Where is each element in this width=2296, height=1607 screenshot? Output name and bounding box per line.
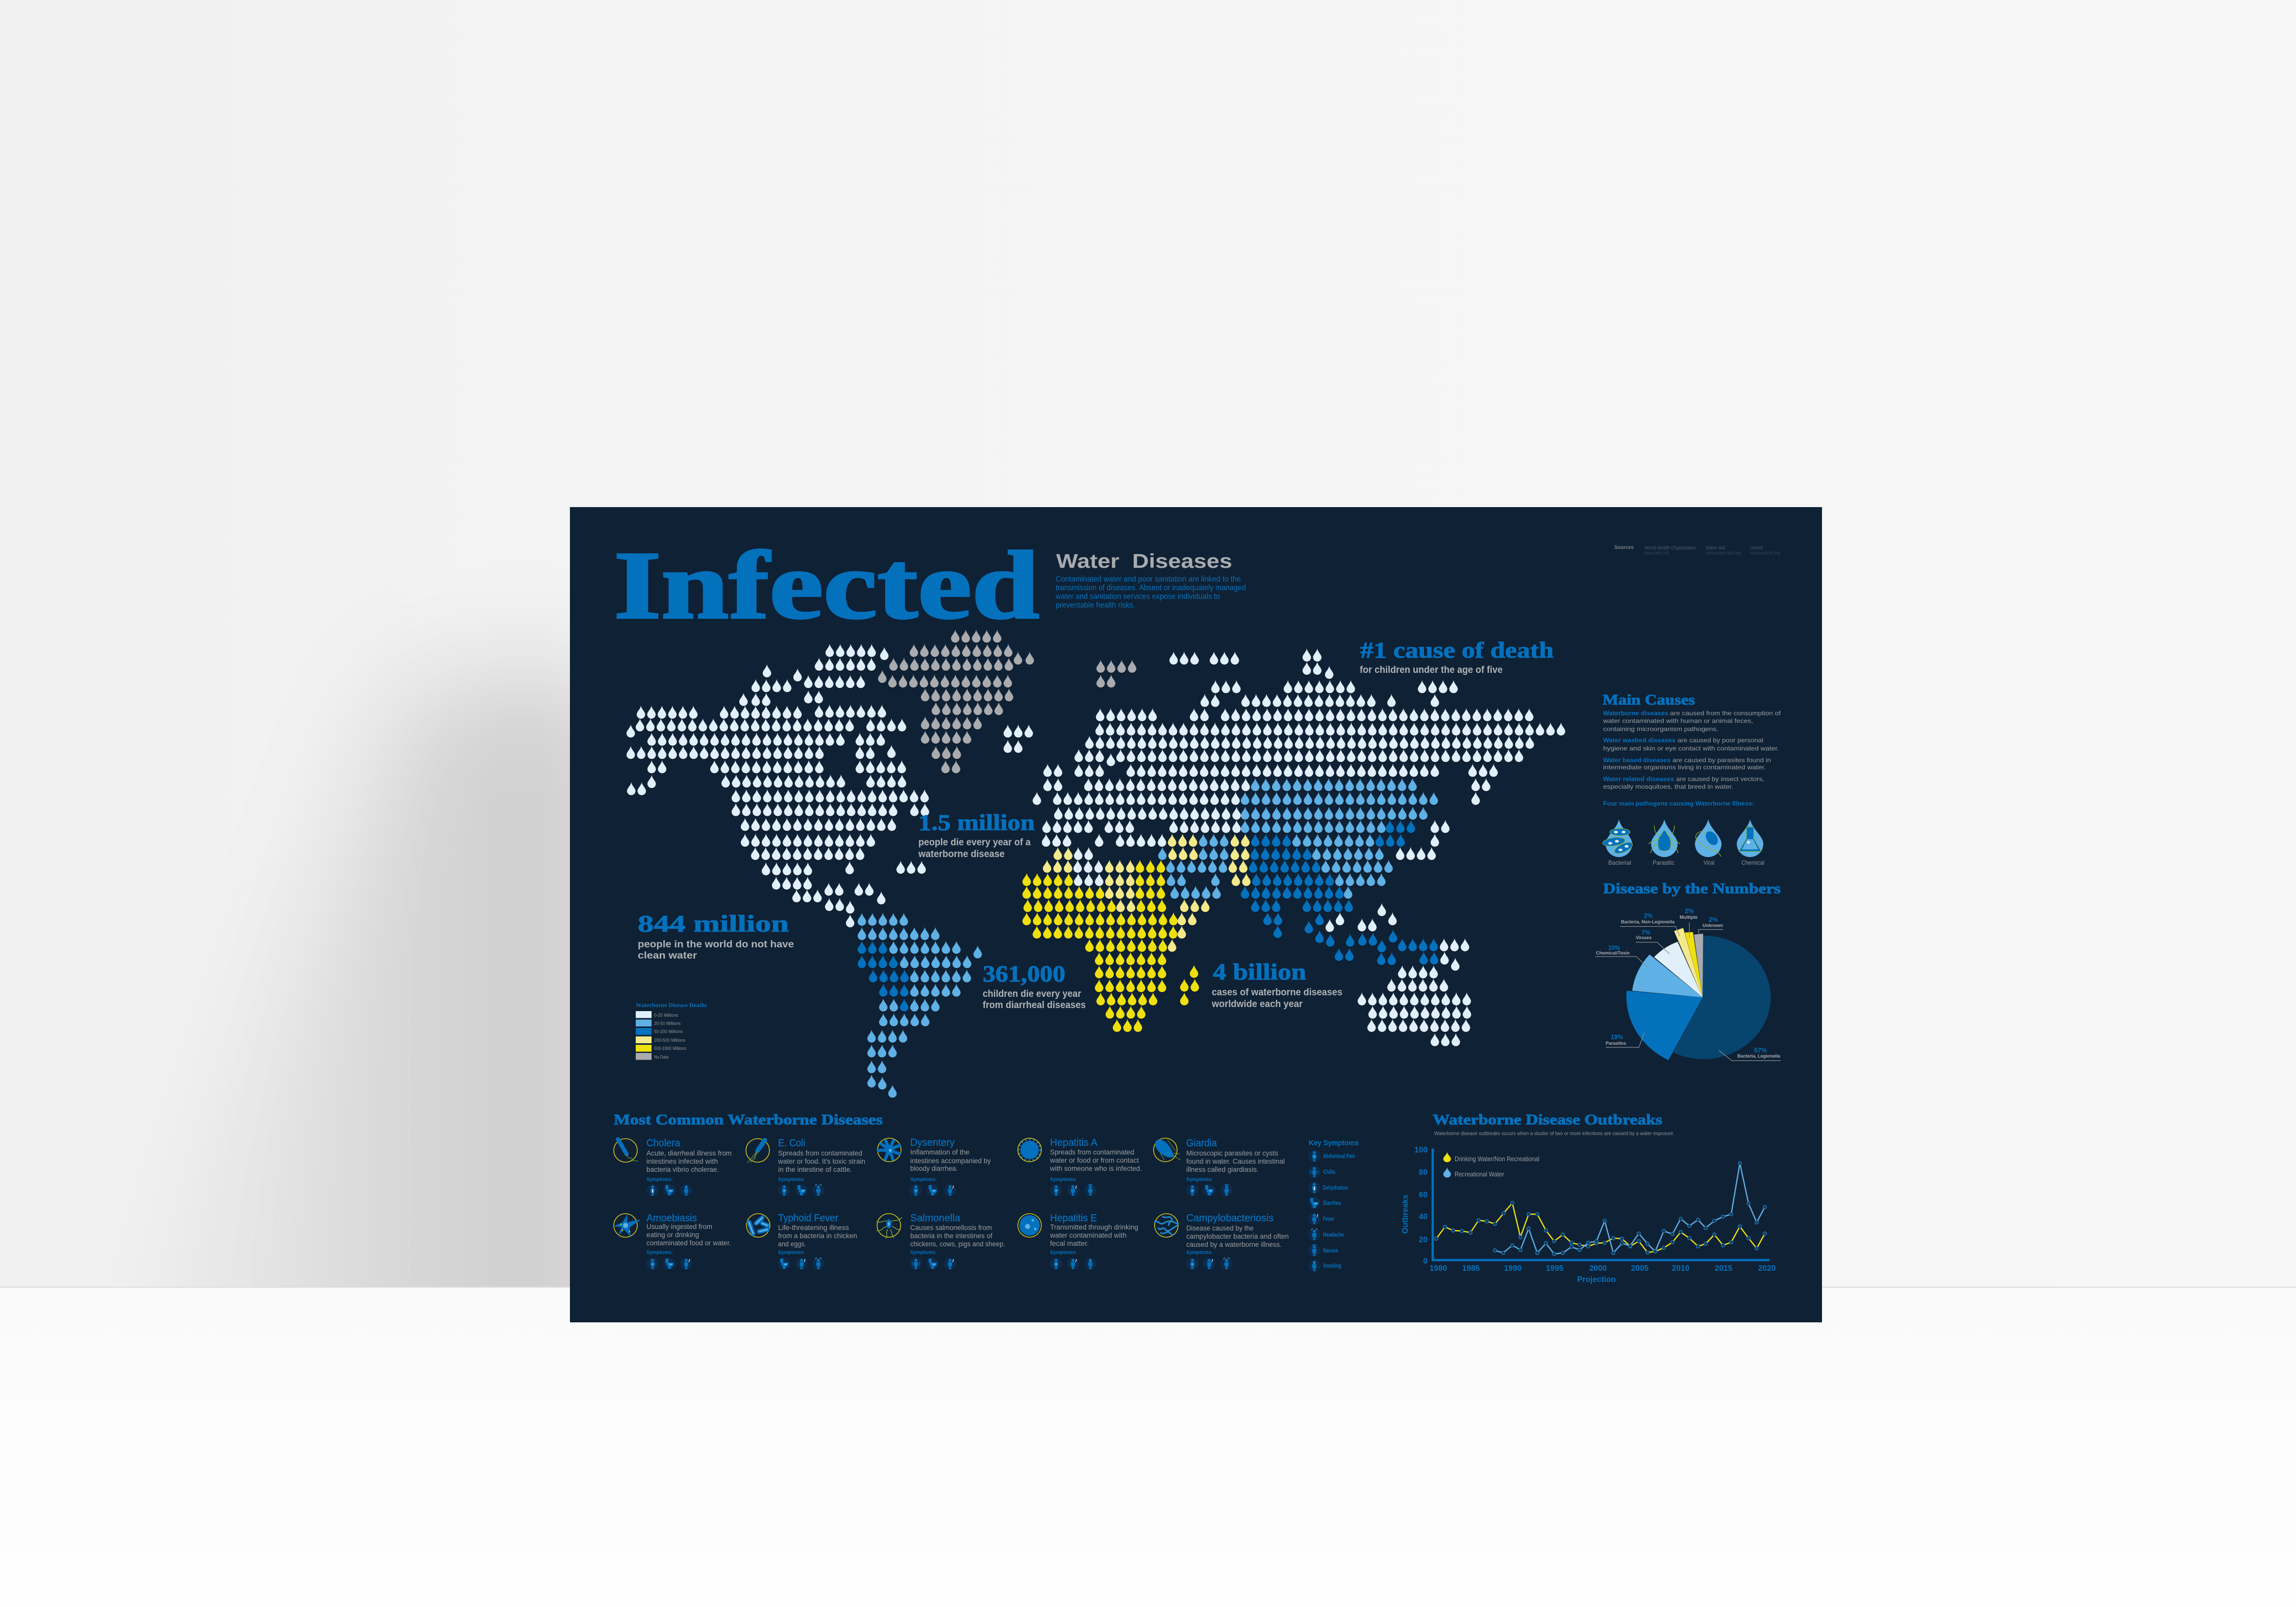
panel: key symptoms: Key Symptoms <box>1309 1139 1359 1147</box>
card: campylobacteriosis: Symptoms: <box>1186 1249 1213 1256</box>
panel: waterborne disease outbreaks: Waterborne Disease Outbreaks <box>1433 1112 1662 1128</box>
intro text: preventable health risks. <box>1056 601 1135 610</box>
line chart: 1995 <box>1546 1264 1564 1273</box>
card: hepatitis a: with someone who is infected. <box>1050 1165 1142 1172</box>
map region: greenland and arctic (no data) <box>878 630 1137 774</box>
card: amoebiasis: Usually ingested from <box>646 1223 712 1231</box>
map legend: 20-50 Millions <box>654 1021 681 1026</box>
panel: key symptoms: Diarrhea <box>1323 1200 1341 1207</box>
stat: 4 billion: 4 billion <box>1213 959 1306 985</box>
map legend: No Data <box>654 1054 669 1060</box>
card: typhoid fever: from a bacteria in chicken <box>778 1232 857 1240</box>
stat: 844 million <box>638 911 794 961</box>
stat: 361,000 <box>983 961 1086 1011</box>
card: amoebiasis <box>613 1213 731 1269</box>
card: hepatitis e: Hepatitis E <box>1050 1213 1097 1224</box>
stat: 361,000: children die every year <box>983 989 1082 999</box>
panel: main causes: water contaminated with human or animal feces, <box>1603 717 1753 724</box>
card: giardia: illness called giardiasis. <box>1186 1166 1259 1173</box>
icon: hepatitis e virus <box>1018 1214 1041 1237</box>
line chart: 2010 <box>1672 1264 1689 1273</box>
card: salmonella <box>877 1213 1005 1269</box>
card: cholera: bacteria vibrio cholerae. <box>646 1166 719 1173</box>
stat: 1.5 million: 1.5 million <box>918 810 1035 835</box>
sources: World Health Organization <box>1644 545 1696 551</box>
intro text <box>1055 575 1246 610</box>
sources: www.unicef.org <box>1750 550 1780 556</box>
line chart: 80 <box>1419 1168 1428 1177</box>
pie labels: Parasites <box>1606 1041 1626 1046</box>
line chart: 0 <box>1423 1257 1428 1266</box>
stat: 4 billion: worldwide each year <box>1211 999 1303 1010</box>
panel: main causes: Bacterial <box>1608 859 1631 866</box>
card: cholera: intestines infected with <box>646 1158 718 1165</box>
map region: africa <box>1022 847 1200 1033</box>
pie chart <box>1627 928 1771 1060</box>
card: amoebiasis: eating or drinking <box>646 1231 699 1239</box>
card: campylobacteriosis: Disease caused by the <box>1186 1224 1254 1232</box>
pie labels: 57% <box>1754 1046 1767 1054</box>
icon: cholera bacterium <box>614 1139 638 1162</box>
icon: giardia parasite <box>1154 1138 1181 1162</box>
line chart: 1990 <box>1504 1264 1521 1273</box>
icon: e. coli bacterium <box>746 1139 769 1163</box>
line chart: 1980 <box>1430 1264 1447 1273</box>
map legend <box>636 1001 707 1060</box>
stat: 844 million: clean water <box>638 950 697 961</box>
line chart: Projection <box>1577 1275 1616 1284</box>
panel: main causes: Main Causes <box>1603 692 1695 708</box>
pie labels: 2% <box>1685 907 1694 915</box>
stat: 1.5 million: waterborne disease <box>918 849 1005 860</box>
card: typhoid fever: Life-threatening illness <box>778 1224 849 1232</box>
pie labels: 7% <box>1641 928 1651 936</box>
panel: main causes: are caused by poor personal <box>1678 737 1763 744</box>
card: hepatitis a <box>1018 1137 1142 1196</box>
pie labels: 2% <box>1709 916 1718 923</box>
intro text: transmission of diseases. Absent or inadequately managed <box>1056 584 1246 592</box>
card: giardia: Symptoms: <box>1186 1176 1213 1183</box>
map region: north america <box>626 644 930 928</box>
poster <box>570 507 1822 1322</box>
map region: eurasia <box>1032 648 1566 939</box>
card: amoebiasis: Amoebiasis <box>646 1213 697 1224</box>
panel: main causes: Water washed diseases <box>1603 737 1676 744</box>
stat: #1 cause of death: #1 cause of death <box>1360 638 1554 663</box>
card: e. coli <box>746 1138 865 1196</box>
card: e. coli: E. Coli <box>778 1138 805 1149</box>
panel: disease by the numbers: Disease by the Numbers <box>1603 881 1781 897</box>
panel: main causes: Parasitic <box>1653 859 1675 866</box>
card: dysentery: intestines accompanied by <box>910 1157 991 1165</box>
panel: main causes: Water based diseases <box>1603 757 1670 764</box>
chart legend: Drinking Water/Non Recreational <box>1455 1155 1539 1163</box>
line chart: 2000 <box>1589 1264 1607 1273</box>
card: typhoid fever: Typhoid Fever <box>778 1213 838 1224</box>
card: dysentery: Dysentery <box>910 1137 955 1148</box>
pie labels: Bacteria, Legionella <box>1737 1053 1781 1059</box>
card: campylobacteriosis: caused by a waterborne illness. <box>1186 1241 1282 1248</box>
panel: main causes: are caused by parasites found in <box>1673 757 1771 764</box>
panel: main causes: Chemical <box>1741 859 1764 866</box>
icon: viral <box>1695 819 1721 857</box>
sources: www.who.int <box>1644 550 1669 556</box>
pie labels: 19% <box>1611 1033 1623 1041</box>
panel: main causes: Waterborne diseases <box>1603 710 1668 717</box>
pie labels: Multiple <box>1680 915 1698 920</box>
panel: main causes: containing microorganism pathogens. <box>1603 725 1718 733</box>
panel: key symptoms: Dehydration <box>1323 1185 1348 1191</box>
panel: main causes: Water related diseases <box>1603 775 1674 783</box>
intro text: Contaminated water and poor sanitation are linked to the <box>1056 575 1241 584</box>
map legend: 200-500 Millions <box>654 1038 685 1043</box>
line chart: 2005 <box>1631 1264 1649 1273</box>
heading: most common waterborne diseases: Most Common Waterborne Diseases <box>614 1112 883 1128</box>
line chart: Outbreaks <box>1401 1195 1410 1234</box>
card: salmonella: Symptoms: <box>910 1249 937 1256</box>
card: e. coli: in the intestine of cattle. <box>778 1166 852 1173</box>
line chart: 1985 <box>1462 1264 1480 1273</box>
card: hepatitis e: fecal matter. <box>1050 1240 1089 1247</box>
card: hepatitis a: Hepatitis A <box>1050 1137 1098 1148</box>
stat: 361,000: from diarrheal diseases <box>983 1000 1086 1011</box>
icon: bacterial <box>1602 819 1634 857</box>
sources: www.wateraid.org <box>1705 550 1741 556</box>
stat: #1 cause of death <box>1360 638 1554 675</box>
sources <box>1614 545 1780 556</box>
panel: main causes: especially mosquitoes, that breed in water. <box>1603 783 1733 790</box>
card: hepatitis e <box>1018 1213 1138 1269</box>
sources: Water Aid <box>1706 545 1725 551</box>
pie labels: Unknown <box>1703 923 1723 928</box>
card: giardia: Giardia <box>1186 1138 1217 1149</box>
sources: Sources <box>1614 545 1634 550</box>
panel: main causes: intermediate organisms living in contaminated water. <box>1603 764 1766 771</box>
card: hepatitis a: Spreads from contaminated <box>1050 1148 1134 1156</box>
card: hepatitis e: water contaminated with <box>1050 1232 1127 1239</box>
pie labels: 2% <box>1644 912 1653 919</box>
map region: south america <box>857 913 983 1099</box>
card: salmonella: Salmonella <box>910 1213 961 1224</box>
stat: 361,000: 361,000 <box>983 961 1065 987</box>
card: e. coli: Spreads from contaminated <box>778 1149 862 1157</box>
card: hepatitis a: Symptoms: <box>1050 1176 1077 1183</box>
pie labels: Viruses <box>1636 935 1652 941</box>
card: cholera: Symptoms: <box>646 1176 673 1183</box>
panel: disease by the numbers <box>1595 881 1781 1061</box>
card: amoebiasis: Symptoms: <box>646 1249 673 1256</box>
panel: key symptoms: Vomiting <box>1323 1263 1341 1269</box>
card: cholera <box>614 1138 732 1196</box>
card: hepatitis a: water or food or from contact <box>1050 1157 1139 1164</box>
panel: main causes: Viral <box>1704 859 1714 866</box>
icon: chemical <box>1737 819 1763 857</box>
stat: 844 million: 844 million <box>638 911 789 937</box>
panel: key symptoms: Headache <box>1323 1232 1344 1238</box>
line chart: 100 <box>1414 1146 1428 1154</box>
card: dysentery: bloody diarrhea. <box>910 1165 958 1172</box>
panel: main causes: are caused from the consumption of <box>1670 710 1781 717</box>
stat: 1.5 million: people die every year of a <box>918 837 1031 848</box>
card: salmonella: bacteria in the intestines of <box>910 1232 992 1240</box>
card: amoebiasis: contaminated food or water. <box>646 1239 731 1247</box>
title: Infected <box>614 532 1039 639</box>
world map of water drops <box>626 630 1566 1099</box>
card: campylobacteriosis <box>1154 1213 1289 1269</box>
card: giardia <box>1154 1138 1285 1196</box>
panel: waterborne disease outbreaks <box>1401 1112 1776 1284</box>
icon: hepatitis a virus <box>1018 1138 1041 1162</box>
background: cast shadow <box>203 639 570 1287</box>
line chart: 20 <box>1419 1236 1428 1244</box>
background: floor <box>0 1287 2296 1607</box>
card: dysentery <box>878 1137 991 1196</box>
pie labels: 10% <box>1608 944 1620 951</box>
pie labels <box>1595 907 1781 1061</box>
icon: dysentery organism <box>878 1138 901 1162</box>
card: dysentery: Symptoms: <box>910 1176 937 1183</box>
panel: main causes <box>1602 692 1781 866</box>
card: typhoid fever: Symptoms: <box>778 1249 805 1256</box>
panel: key symptoms <box>1308 1139 1359 1271</box>
card: salmonella: chickens, cows, pigs and sheep. <box>910 1240 1005 1248</box>
card: hepatitis e: Transmitted through drinking <box>1050 1223 1138 1231</box>
panel: key symptoms: Fever <box>1323 1216 1334 1222</box>
stat: 844 million: people in the world do not have <box>638 939 794 950</box>
panel: main causes: hygiene and skin or eye contact with contaminated water. <box>1603 745 1779 752</box>
icon: salmonella bacterium <box>877 1214 902 1239</box>
chart legend <box>1443 1152 1539 1178</box>
map legend: Waterborne Disease Deaths <box>636 1001 707 1009</box>
stat: #1 cause of death: for children under the age of five <box>1360 665 1503 675</box>
pie labels: Chemical/Toxin <box>1596 950 1630 956</box>
map region: southeast asia and oceania <box>1304 903 1473 1047</box>
card: giardia: found in water. Causes intestinal <box>1186 1158 1285 1165</box>
stat: 4 billion <box>1211 959 1342 1010</box>
icon: amoeba <box>613 1214 641 1237</box>
panel: main causes: are caused by insect vectors, <box>1676 775 1764 783</box>
panel: key symptoms: Abdominal Pain <box>1323 1153 1355 1160</box>
card: campylobacteriosis: campylobacter bacteria and often <box>1186 1233 1289 1240</box>
map legend: 0-20 Millions <box>654 1013 678 1018</box>
stat: 1.5 million <box>918 810 1035 860</box>
icon: parasitic <box>1649 819 1680 857</box>
pie labels: Bacteria, Non-Legionella <box>1621 919 1675 925</box>
stat: 4 billion: cases of waterborne diseases <box>1212 987 1342 998</box>
card: e. coli: Symptoms: <box>778 1176 805 1183</box>
icon: typhoid bacteria <box>746 1214 770 1237</box>
card: typhoid fever <box>746 1213 857 1269</box>
line chart <box>1401 1146 1776 1284</box>
line chart: 2020 <box>1758 1264 1776 1273</box>
sources: Unicef <box>1750 545 1763 551</box>
card: giardia: Microscopic parasites or cysts <box>1186 1149 1278 1157</box>
card: dysentery: Inflammation of the <box>910 1148 969 1156</box>
chart legend: Recreational Water <box>1455 1170 1505 1178</box>
panel: key symptoms: Chills <box>1323 1169 1335 1175</box>
card: campylobacteriosis: Campylobacteriosis <box>1186 1213 1274 1224</box>
line chart: 40 <box>1419 1213 1428 1221</box>
card: hepatitis e: Symptoms: <box>1050 1249 1077 1256</box>
card: typhoid fever: and eggs. <box>778 1240 806 1248</box>
card: cholera: Acute, diarrheal illness from <box>646 1149 732 1157</box>
panel: key symptoms: Nausea <box>1323 1248 1338 1254</box>
intro text: water and sanitation services expose individuals to <box>1055 592 1220 601</box>
card: cholera: Cholera <box>646 1138 681 1149</box>
card: e. coli: water or food. It's toxic strain <box>778 1158 865 1165</box>
card: salmonella: Causes salmonellosis from <box>910 1224 992 1232</box>
map legend: 500-1900 Millions <box>654 1046 686 1051</box>
map legend: 50-200 Millions <box>654 1029 683 1035</box>
icon: campylobacter <box>1154 1214 1179 1237</box>
subtitle: Water Diseases <box>1056 550 1232 572</box>
line chart: 2015 <box>1715 1264 1733 1273</box>
line chart: 60 <box>1419 1191 1428 1199</box>
panel: main causes: Four main pathogens causing Waterborne Illness: <box>1603 800 1754 807</box>
panel: waterborne disease outbreaks: Waterborne disease outbreaks occurs when a cluster of two or more infections are caused by a water exposure. <box>1434 1131 1675 1137</box>
